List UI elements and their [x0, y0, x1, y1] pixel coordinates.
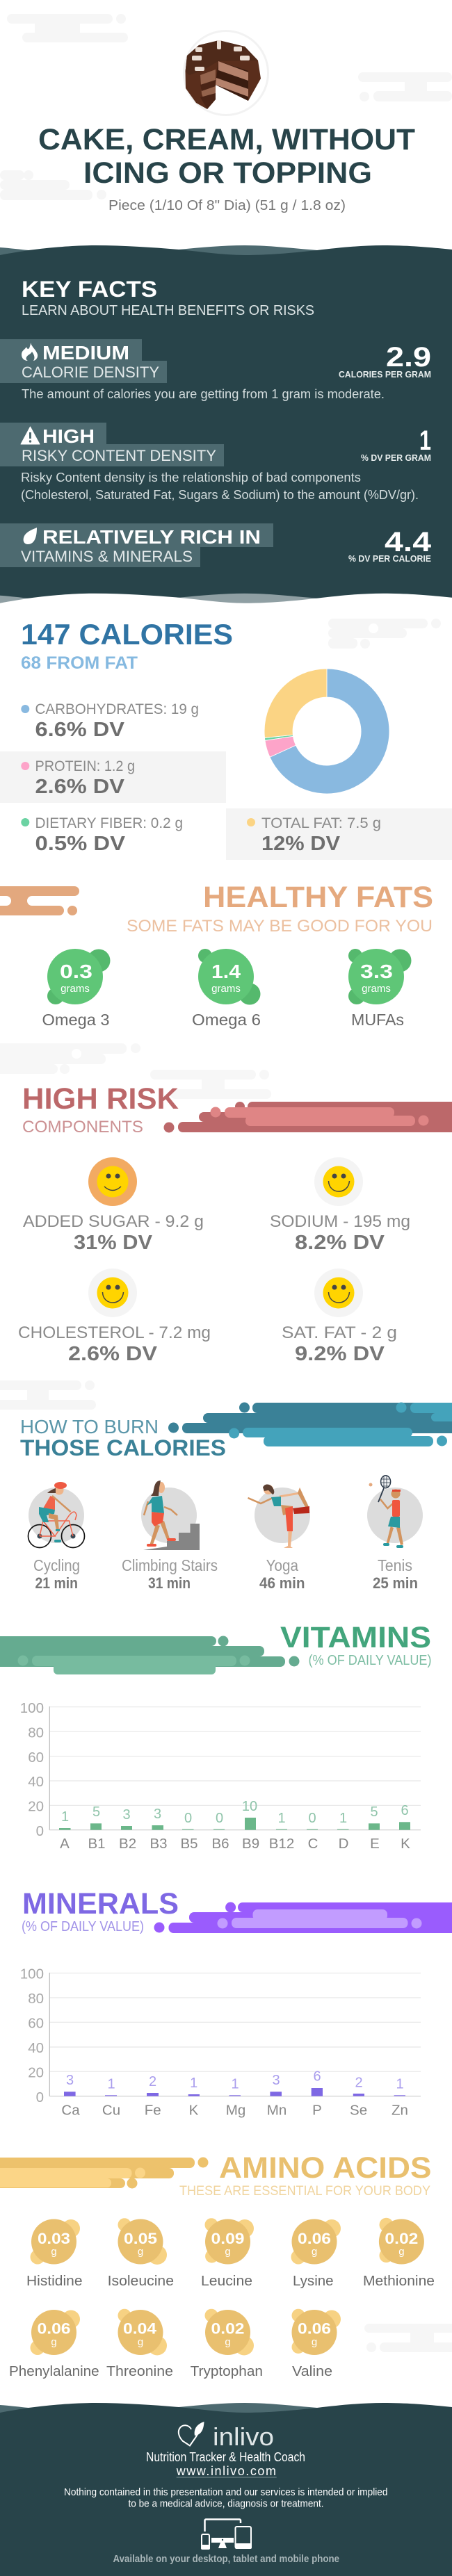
fat badge: omega 3: 0.3 — [60, 961, 92, 982]
amino: methionine: g — [398, 2246, 405, 2258]
activity: cycling: 21 min — [35, 1574, 78, 1592]
bar chart: minerals: P — [312, 2103, 322, 2119]
amino: threonine — [106, 2309, 173, 2379]
heading: vitamins: VITAMINS — [280, 1621, 431, 1654]
icon: smiley — [314, 1269, 363, 1317]
activity: tennis: 25 min — [373, 1574, 418, 1592]
decorative cloud: red — [164, 1102, 452, 1133]
amino: isoleucine — [108, 2218, 174, 2289]
amino: methionine: 0.02 — [385, 2230, 418, 2247]
risk item: cholesterol: 2.6% DV — [68, 1343, 158, 1365]
fat badge: omega 3: Omega 3 — [42, 1011, 110, 1029]
risk item: saturated fat — [282, 1269, 397, 1365]
macro: carbohydrates — [21, 701, 199, 741]
bar chart: minerals: 1 — [396, 2076, 404, 2092]
amino: lysine: 0.06 — [298, 2230, 331, 2247]
icon: stair climber — [141, 1481, 200, 1550]
risk item: added sugar: ADDED SUGAR - 9.2 g — [23, 1212, 204, 1231]
amino: lysine — [291, 2219, 341, 2289]
decorative cloud: yellow — [0, 2158, 209, 2188]
heading: minerals: MINERALS — [22, 1887, 179, 1921]
bar chart: minerals: 3 — [66, 2073, 74, 2088]
vitamins and minerals label — [0, 523, 273, 567]
macro: carbohydrates: CARBOHYDRATES: 19 g — [35, 701, 199, 717]
metric: calories per gram: 2.9 — [386, 342, 431, 373]
fat badge: omega 6 — [192, 949, 261, 1029]
fat badge: omega 6: grams — [211, 983, 241, 995]
amino: valine: g — [312, 2336, 317, 2348]
icon: tennis player — [367, 1476, 423, 1548]
panel: how to burn those calories — [0, 1380, 452, 1592]
risk item: saturated fat: SAT. FAT - 2 g — [282, 1323, 397, 1342]
panel: healthy fats — [0, 881, 433, 1029]
macro: dietary fiber: 0.5% DV — [35, 833, 126, 855]
amino: lysine: Lysine — [293, 2273, 334, 2289]
icon: smiley — [314, 1157, 363, 1206]
bar chart: vitamins: 0 — [308, 1811, 316, 1826]
amino: threonine: g — [138, 2336, 143, 2348]
activity: yoga: 46 min — [259, 1574, 305, 1592]
metric: % dv per gram — [361, 425, 431, 463]
activity: yoga — [248, 1485, 310, 1592]
amino: valine: 0.06 — [298, 2320, 331, 2338]
bar chart: vitamins: 1 — [277, 1811, 286, 1826]
bar chart: minerals: Mn — [267, 2103, 286, 2119]
macro: total fat: 12% DV — [261, 833, 341, 855]
bar chart: minerals: 2 — [355, 2075, 363, 2090]
macro: dietary fiber: DIETARY FIBER: 0.2 g — [35, 815, 183, 831]
highlight rows — [0, 751, 226, 803]
activity: cycling — [28, 1482, 85, 1592]
macro: total fat — [247, 815, 381, 855]
calorie density label: CALORIE DENSITY — [22, 364, 159, 381]
activity: climbing stairs: Climbing Stairs — [122, 1556, 218, 1574]
amino: isoleucine: 0.05 — [124, 2230, 157, 2247]
macro: protein: 2.6% DV — [35, 776, 125, 798]
bar chart: minerals: 1 — [190, 2076, 197, 2091]
heading: high risk: HIGH RISK — [22, 1082, 179, 1116]
amino: histidine: g — [51, 2246, 57, 2258]
disclaimer — [64, 2486, 388, 2510]
bar chart: minerals: 20 — [28, 2064, 44, 2081]
bar chart: minerals: 2 — [149, 2074, 156, 2089]
amino: phenylalanine — [9, 2310, 99, 2379]
availability note: Available on your desktop, tablet and mobile phone — [113, 2553, 339, 2565]
icon: warning triangle — [21, 427, 40, 444]
bar chart: vitamins: B5 — [180, 1836, 198, 1852]
bar chart: vitamins: 3 — [154, 1807, 161, 1822]
amino: threonine: 0.04 — [123, 2320, 157, 2338]
bar chart: vitamins: B1 — [88, 1836, 106, 1852]
bar chart: vitamins: B6 — [211, 1836, 229, 1852]
risky content description: (Cholesterol, Saturated Fat, Sugars & Sodium) to the amount (%DV/gr). — [21, 488, 419, 502]
bar chart: vitamins: 6 — [401, 1803, 409, 1818]
logo: inlivo — [179, 2422, 274, 2451]
metric: % dv per gram: 1 — [419, 425, 431, 456]
panel: vitamins — [0, 1621, 431, 1852]
metric: calories per gram — [339, 342, 431, 380]
bar chart: vitamins: E — [370, 1836, 380, 1852]
disclaimer: to be a medical advice, diagnosis or treatment. — [128, 2498, 324, 2510]
bar chart: minerals: Zn — [392, 2103, 408, 2119]
amino: valine — [292, 2309, 341, 2379]
donut chart — [264, 669, 389, 794]
title — [38, 123, 415, 190]
tagline: Nutrition Tracker & Health Coach — [146, 2450, 305, 2464]
fat badge: mufas: 3.3 — [360, 961, 393, 982]
title: ICING OR TOPPING — [83, 156, 372, 190]
bar chart: vitamins: 1 — [61, 1809, 69, 1825]
amino: phenylalanine: 0.06 — [38, 2320, 71, 2338]
heading: how to burn: HOW TO BURN — [20, 1416, 159, 1437]
bar chart: vitamins — [20, 1700, 421, 1852]
risk item: sodium: 8.2% DV — [295, 1232, 385, 1254]
amino: phenylalanine: Phenylalanine — [9, 2363, 99, 2379]
bar chart: minerals: 1 — [107, 2076, 115, 2092]
calorie density label — [0, 339, 167, 383]
icon: devices — [201, 2519, 252, 2550]
vitamins and minerals label: VITAMINS & MINERALS — [21, 548, 193, 565]
background cloud — [328, 619, 441, 649]
decorative cloud: teal — [168, 1403, 452, 1446]
bar chart: vitamins: B3 — [150, 1836, 168, 1852]
bar chart: vitamins: B9 — [242, 1836, 259, 1852]
bar chart: vitamins: D — [339, 1836, 348, 1852]
bar chart: vitamins: B12 — [269, 1836, 294, 1852]
panel: minerals — [20, 1887, 452, 2119]
bar chart: minerals: 6 — [313, 2069, 321, 2085]
fat badge: mufas — [348, 949, 412, 1029]
activity: climbing stairs: 31 min — [148, 1574, 191, 1592]
risky content label — [0, 423, 224, 466]
fat badge: mufas: grams — [362, 983, 391, 995]
risk item: sodium — [270, 1157, 410, 1254]
metric: % dv per calorie — [348, 527, 432, 564]
bar chart: minerals: Se — [350, 2103, 367, 2119]
icon: flame — [22, 343, 38, 361]
macro: carbohydrates: 6.6% DV — [35, 719, 125, 741]
amino: methionine: Methionine — [363, 2273, 435, 2289]
amino: leucine: g — [225, 2246, 231, 2258]
amino: leucine: Leucine — [201, 2273, 252, 2289]
macro: total fat: TOTAL FAT: 7.5 g — [261, 815, 381, 831]
amino: tryptophan — [191, 2309, 263, 2379]
background cloud — [0, 1380, 96, 1410]
bar chart: minerals: K — [189, 2103, 199, 2119]
subheading: learn about: LEARN ABOUT HEALTH BENEFITS OR RISKS — [22, 303, 314, 318]
amino: tryptophan: g — [225, 2336, 231, 2348]
background cloud — [364, 2324, 452, 2352]
bar chart: minerals: Ca — [61, 2103, 80, 2119]
bar chart: vitamins: 3 — [122, 1807, 131, 1823]
panel: high risk components — [18, 1082, 452, 1365]
subheading: amino acids: THESE ARE ESSENTIAL FOR YOUR BODY — [179, 2184, 430, 2199]
amino: lysine: g — [312, 2246, 317, 2258]
risky content description: Risky Content density is the relationship of bad components — [21, 471, 361, 484]
bar chart: minerals: 60 — [28, 2016, 44, 2031]
bar chart: vitamins: 0 — [36, 1823, 44, 1839]
macro: protein — [21, 758, 135, 798]
background clouds: header — [0, 14, 452, 200]
logo: inlivo: inlivo — [213, 2422, 274, 2451]
heading: those calories: THOSE CALORIES — [20, 1435, 226, 1460]
risky content label: RISKY CONTENT DENSITY — [22, 447, 216, 464]
title: CAKE, CREAM, WITHOUT — [38, 123, 415, 156]
bar chart: vitamins: 40 — [28, 1774, 44, 1790]
heading: key facts: KEY FACTS — [22, 277, 157, 302]
heading: amino acids: AMINO ACIDS — [219, 2151, 431, 2185]
bar chart: minerals: 80 — [28, 1991, 44, 2007]
subheading: components: COMPONENTS — [22, 1118, 143, 1136]
risk item: saturated fat: 9.2% DV — [295, 1343, 385, 1365]
bar chart: minerals: Mg — [226, 2103, 245, 2119]
serving size subtitle: Piece (1/10 Of 8" Dia) (51 g / 1.8 oz) — [108, 198, 346, 213]
calorie density label: MEDIUM — [42, 342, 129, 364]
risk item: cholesterol: CHOLESTEROL - 7.2 mg — [18, 1323, 211, 1342]
bar chart: vitamins: 10 — [242, 1799, 257, 1814]
subheading: from fat: 68 FROM FAT — [21, 653, 138, 673]
bar chart: vitamins: 0 — [216, 1811, 223, 1826]
bar chart: vitamins: 0 — [184, 1811, 192, 1826]
subheading: healthy fats: SOME FATS MAY BE GOOD FOR YOU — [127, 917, 433, 936]
decorative cloud: orange — [0, 886, 79, 915]
fat badge: omega 6: Omega 6 — [192, 1011, 261, 1029]
bar chart: minerals — [20, 1966, 421, 2119]
bar chart: minerals: 0 — [36, 2089, 44, 2105]
fat badge: mufas: MUFAs — [351, 1011, 404, 1029]
bar chart: vitamins: 20 — [28, 1799, 44, 1814]
bar chart: minerals: 1 — [231, 2076, 239, 2092]
icon: cyclist — [28, 1482, 85, 1547]
vitamins and minerals label: RELATIVELY RICH IN — [42, 526, 261, 548]
background clouds: mid — [0, 1043, 271, 1099]
activity: yoga: Yoga — [266, 1556, 298, 1574]
decorative cloud: purple — [154, 1902, 452, 1933]
subheading: percent of daily value: (% OF DAILY VALUE) — [309, 1653, 431, 1668]
icon: leaf — [24, 528, 37, 544]
heading: calories: 147 CALORIES — [21, 618, 233, 651]
amino: methionine — [363, 2218, 435, 2289]
amino: histidine — [26, 2219, 82, 2289]
amino: tryptophan: Tryptophan — [191, 2363, 263, 2379]
fat badge: omega 3 — [42, 949, 110, 1029]
metric: % dv per gram: % DV PER GRAM — [361, 453, 431, 463]
macro: protein: PROTEIN: 1.2 g — [35, 758, 135, 774]
fat badge: omega 6: 1.4 — [211, 961, 241, 982]
disclaimer: Nothing contained in this presentation and our services is intended or implied — [64, 2486, 388, 2498]
bar chart: minerals: 3 — [272, 2073, 280, 2088]
website link: www.inlivo.com — [176, 2464, 276, 2478]
risky content description — [21, 471, 419, 502]
risk item: added sugar — [23, 1157, 204, 1254]
activity: tennis — [367, 1476, 423, 1592]
heading: healthy fats: HEALTHY FATS — [203, 881, 433, 914]
activity: tennis: Tenis — [378, 1556, 412, 1574]
bar chart: minerals: 100 — [20, 1966, 44, 1982]
panel: calories and macronutrients — [0, 618, 452, 860]
macro: dietary fiber — [21, 815, 183, 855]
fat badge: omega 3: grams — [60, 983, 90, 995]
icon: smiley — [88, 1269, 137, 1317]
amino: valine: Valine — [292, 2363, 332, 2379]
bar chart: vitamins: C — [308, 1836, 318, 1852]
risk item: cholesterol — [18, 1269, 211, 1365]
amino: leucine — [201, 2218, 254, 2289]
bar chart: vitamins: 80 — [28, 1725, 44, 1741]
bar chart: vitamins: B2 — [119, 1836, 136, 1852]
icon: chocolate cake photo — [184, 31, 268, 115]
panel: footer — [0, 2403, 452, 2576]
icon: smiley — [88, 1157, 137, 1206]
amino: histidine: Histidine — [26, 2273, 82, 2289]
bar chart: vitamins: K — [401, 1836, 410, 1852]
activity: cycling: Cycling — [33, 1556, 80, 1574]
panel: amino acids — [0, 2151, 452, 2379]
amino: phenylalanine: g — [51, 2336, 57, 2348]
bar chart: vitamins: 60 — [28, 1750, 44, 1766]
subheading: percent of daily value: (% OF DAILY VALUE) — [22, 1919, 144, 1934]
bar chart: minerals: Fe — [145, 2103, 161, 2119]
risk item: added sugar: 31% DV — [74, 1232, 153, 1254]
bar chart: vitamins: 5 — [92, 1804, 100, 1820]
amino: isoleucine: g — [138, 2246, 143, 2258]
decorative cloud: green — [0, 1636, 299, 1674]
bar chart: vitamins: A — [60, 1836, 70, 1852]
amino: histidine: 0.03 — [38, 2230, 70, 2247]
bar chart: vitamins: 1 — [339, 1811, 347, 1826]
amino: tryptophan: 0.02 — [211, 2320, 245, 2338]
risky content label: HIGH — [42, 425, 95, 447]
metric: % dv per calorie: % DV PER CALORIE — [348, 553, 431, 564]
calorie density description: The amount of calories you are getting from 1 gram is moderate. — [22, 387, 385, 401]
bar chart: minerals: Cu — [102, 2103, 120, 2119]
metric: calories per gram: CALORIES PER GRAM — [339, 369, 431, 380]
risk item: sodium: SODIUM - 195 mg — [270, 1212, 410, 1231]
amino: isoleucine: Isoleucine — [108, 2273, 174, 2289]
bar chart: minerals: 40 — [28, 2040, 44, 2056]
icon: yoga pose — [248, 1485, 310, 1548]
amino: threonine: Threonine — [106, 2363, 173, 2379]
activity: climbing stairs — [122, 1481, 218, 1592]
metric: % dv per calorie: 4.4 — [385, 527, 432, 557]
panel: key facts — [0, 245, 452, 616]
amino: leucine: 0.09 — [211, 2230, 245, 2247]
bar chart: vitamins: 5 — [370, 1804, 378, 1820]
bar chart: vitamins: 100 — [20, 1700, 44, 1716]
